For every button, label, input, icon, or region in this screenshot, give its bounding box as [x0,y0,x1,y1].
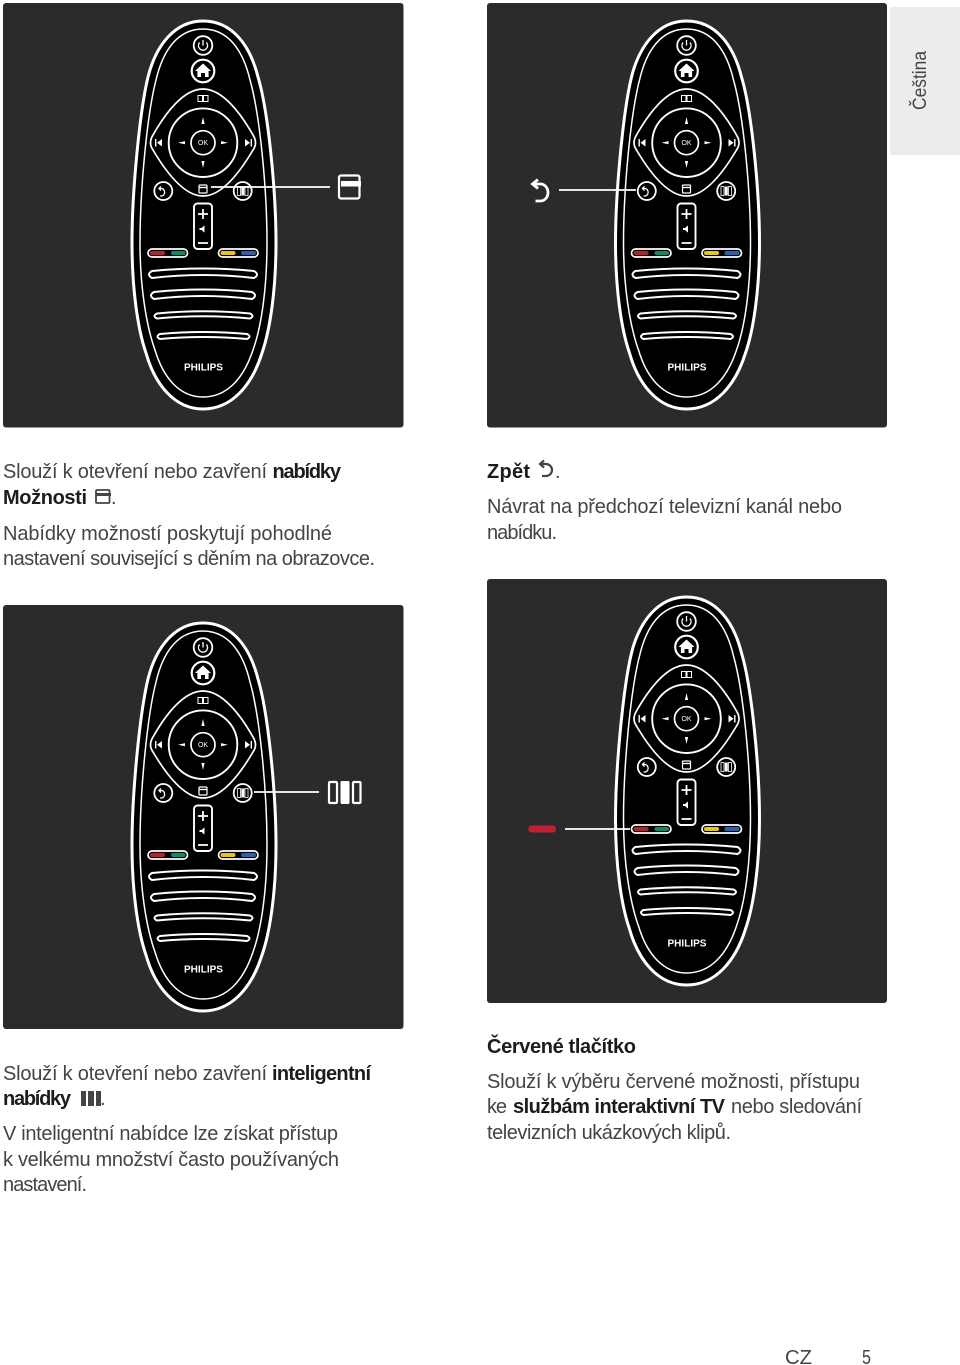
page footer [785,1347,871,1365]
inline back icon [540,460,552,476]
text: red button description: Slouží k výběru červené možnosti, přístupu [487,1071,860,1093]
text: red button description: Červené tlačítko [487,1034,636,1058]
text: options description: Možnosti [3,487,87,509]
remote control illustration [616,597,760,985]
text: smart menu description [3,1063,372,1196]
callout line and back icon [532,180,636,201]
text: options description: Nabídky možností poskytují pohodlné [3,523,332,545]
remote control illustration: PHILIPS [668,938,707,950]
callout line and red bar [528,826,630,832]
remote control illustration: PHILIPS [184,362,223,374]
remote control illustration: OK [198,742,208,749]
remote control illustration: OK [198,140,208,147]
remote control illustration [132,623,276,1011]
text: smart menu description: k velkému množství často používaných [3,1149,339,1171]
inline options icon [96,490,111,503]
panel: options button remote [3,3,404,428]
remote control illustration [616,21,760,409]
text: options description: Slouží k otevření nebo zavření [3,461,267,483]
remote control illustration: OK [681,716,692,723]
remote control illustration: PHILIPS [184,964,223,976]
text: smart menu description: V inteligentní nabídce lze získat přístup [3,1123,338,1145]
language tab: Čeština [909,51,931,110]
text: back description [487,460,842,544]
text: red button description [487,1034,862,1144]
remote control illustration: OK [681,140,692,147]
text: back description: Návrat na předchozí televizní kanál nebo [487,496,842,518]
text: red button description: službám interaktivní TV [513,1096,726,1118]
panel: back button remote [487,3,887,428]
text: back description: Zpět [487,461,530,483]
text: smart menu description: inteligentní [272,1063,372,1085]
text: smart menu description: nabídky [3,1088,72,1110]
panel: red button remote [487,579,887,1003]
language tab [890,7,960,155]
text: options description: nastavení související s děním na obrazovce. [3,548,375,570]
text: options description [3,461,375,570]
text: red button description: televizních ukázkových klipů. [487,1122,731,1144]
text: back description: . [555,461,561,483]
text: smart menu description: nastavení. [3,1174,87,1196]
text: red button description: nebo sledování [731,1096,862,1118]
text: options description: nabídky [272,461,342,483]
text: smart menu description: . [100,1088,106,1110]
panel: smart menu button remote [3,605,404,1029]
remote control illustration [132,21,276,409]
inline smart menu icon [81,1091,101,1106]
text: options description: . [111,487,117,509]
callout line and options icon [211,176,361,198]
callout line and smart menu icon [254,781,360,804]
text: back description: nabídku. [487,522,557,544]
text: red button description: ke [487,1096,507,1118]
text: smart menu description: Slouží k otevření nebo zavření [3,1063,267,1085]
remote control illustration: PHILIPS [668,362,707,374]
